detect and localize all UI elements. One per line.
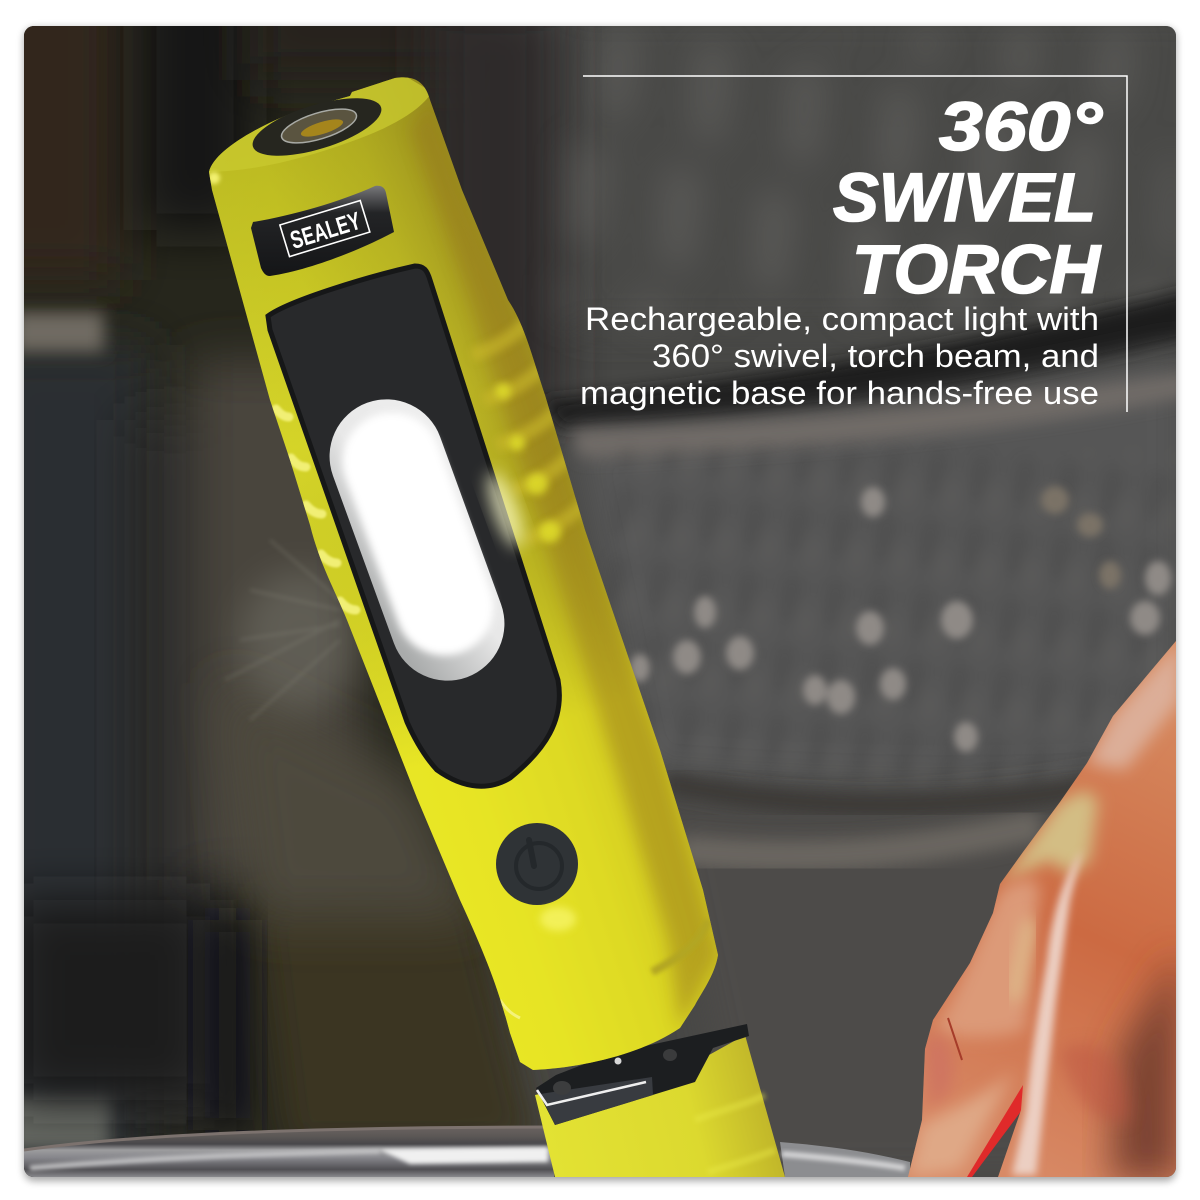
lower ribs (652, 920, 708, 972)
text frame (583, 76, 1127, 412)
upper tyre (1166, 26, 1176, 36)
description: Rechargeable, compact light with (585, 301, 1099, 337)
black panel (268, 266, 559, 786)
hand (900, 630, 1180, 1180)
bokeh dots (630, 487, 1171, 752)
torch lower section (535, 1024, 785, 1177)
joint bracket (536, 1024, 749, 1125)
body shape (209, 77, 718, 1070)
wheel rim (24, 1127, 910, 1177)
lens (252, 98, 382, 156)
side ribs (276, 320, 708, 1018)
hand shading and highlights (1087, 640, 1180, 770)
brand badge: SEALEY (287, 207, 364, 255)
light lens (330, 399, 504, 681)
description: 360° swivel, torch beam, and (652, 338, 1099, 374)
torch upper body (209, 77, 718, 1070)
power button (496, 823, 578, 905)
dark gap between tyres (540, 290, 1190, 430)
title: 360° swivel torch: TORCH (852, 231, 1102, 308)
light rays (225, 540, 340, 720)
lower tyre (1174, 1169, 1176, 1173)
description (580, 301, 1099, 411)
brand badge (251, 186, 394, 276)
title: 360° swivel torch: SWIVEL (833, 159, 1096, 236)
description: magnetic base for hands-free use (580, 375, 1099, 411)
title: 360° swivel torch: 360° (939, 88, 1102, 165)
head top cap (205, 70, 432, 172)
red tool handle (967, 1085, 1023, 1177)
middle tyre (570, 350, 1190, 789)
title: 360° swivel torch (833, 88, 1102, 308)
